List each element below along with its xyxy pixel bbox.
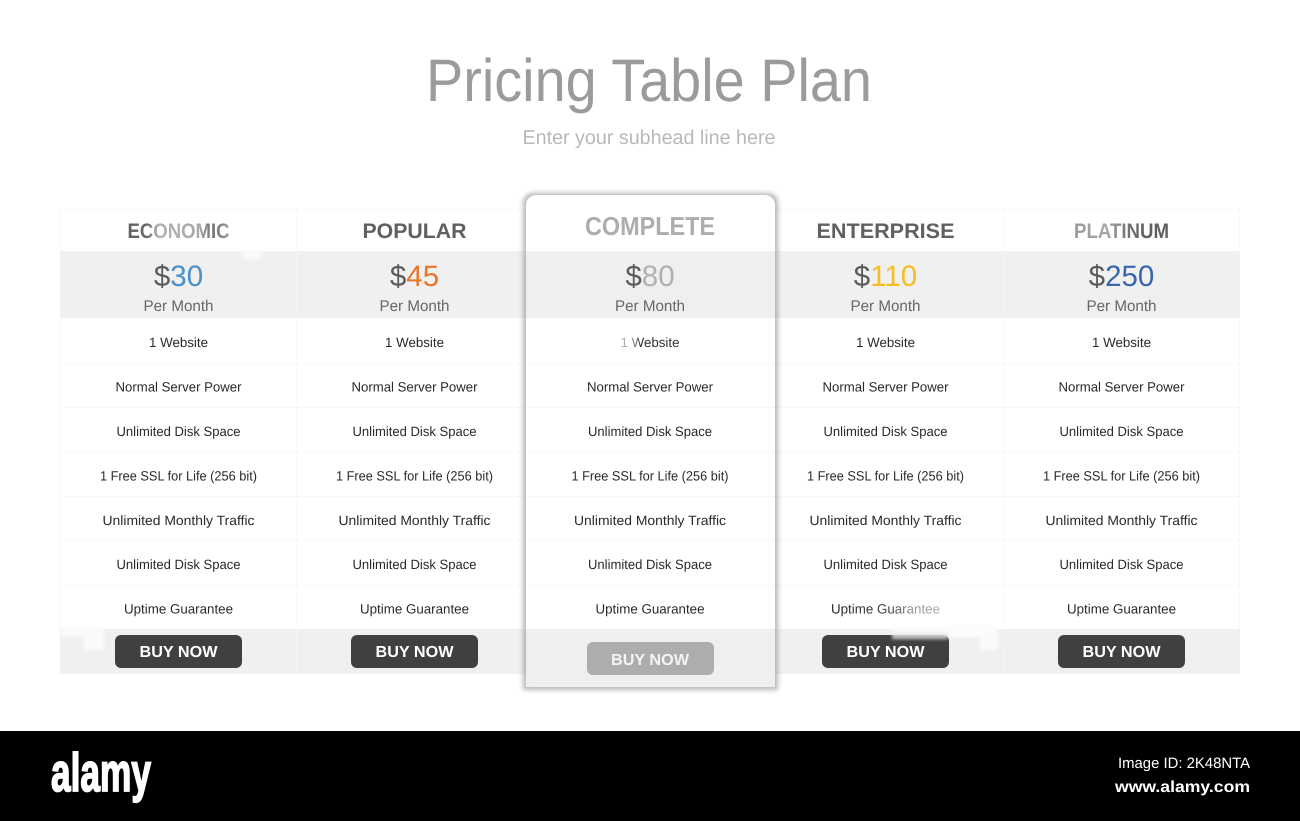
feature list: Unlimited Monthly Traffic: [574, 513, 726, 528]
price: $250: [1089, 260, 1154, 293]
price: $110: [854, 260, 917, 293]
feature list: Uptime Guarantee: [831, 602, 940, 616]
feature list: Normal Server Power: [587, 380, 713, 394]
feature list: Normal Server Power: [116, 380, 242, 394]
feature list: Unlimited Monthly Traffic: [1046, 513, 1198, 528]
subtitle: Enter your subhead line here: [522, 127, 776, 149]
billing period: Per Month: [850, 298, 920, 315]
column: enterprise: [807, 220, 964, 668]
price: $30: [154, 260, 203, 293]
feature list: Uptime Guarantee: [1067, 602, 1176, 616]
feature list: Unlimited Disk Space: [116, 424, 240, 439]
billing period: Per Month: [1086, 298, 1156, 315]
feature list: Normal Server Power: [352, 380, 478, 394]
buy button: [115, 635, 242, 668]
feature list: 1 Website: [1092, 335, 1151, 350]
feature list: Normal Server Power: [822, 380, 949, 394]
feature list: [1043, 335, 1200, 616]
title: Pricing Table Plan: [426, 47, 872, 114]
buy button: [822, 632, 949, 668]
feature list: Unlimited Disk Space: [588, 557, 712, 572]
feature list: Unlimited Disk Space: [1060, 424, 1184, 439]
price: $45: [390, 260, 439, 293]
billing period: Per Month: [144, 298, 214, 315]
feature list: Unlimited Disk Space: [352, 424, 476, 439]
feature list: Unlimited Disk Space: [588, 424, 712, 439]
plan name: COMPLETE: [585, 211, 715, 241]
column: economic: [100, 220, 257, 668]
feature list: Unlimited Monthly Traffic: [810, 513, 962, 528]
feature list: [336, 335, 493, 616]
plan name: PLATINUM: [1074, 220, 1169, 243]
plan name: ECONOMIC: [128, 220, 230, 243]
billing period: Per Month: [615, 298, 685, 315]
footer bar: [0, 731, 1300, 821]
feature list: 1 Website: [620, 335, 680, 350]
feature list: Uptime Guarantee: [596, 602, 704, 616]
feature list: Normal Server Power: [1058, 380, 1185, 394]
buy button: BUY NOW: [376, 644, 454, 661]
feature list: 1 Website: [856, 335, 915, 350]
buy button: [351, 635, 478, 668]
feature list: Uptime Guarantee: [124, 602, 233, 616]
panel: highlighted complete plan: [523, 193, 778, 690]
feature list: Unlimited Monthly Traffic: [338, 513, 491, 528]
buy button: [1058, 635, 1185, 668]
feature list: 1 Free SSL for Life (256 bit): [572, 468, 728, 484]
buy button: BUY NOW: [846, 644, 925, 661]
feature list: 1 Free SSL for Life (256 bit): [807, 468, 964, 484]
buy button: [587, 642, 714, 675]
column: popular: [336, 220, 493, 668]
feature list: 1 Free SSL for Life (256 bit): [100, 468, 257, 484]
price: $80: [625, 260, 675, 293]
column: platinum: [1043, 220, 1200, 668]
website: www.alamy.com: [1114, 779, 1250, 796]
feature list: Unlimited Disk Space: [116, 557, 240, 572]
feature list: 1 Free SSL for Life (256 bit): [336, 468, 493, 484]
feature list: Unlimited Disk Space: [352, 557, 476, 572]
buy button: BUY NOW: [140, 644, 218, 661]
feature list: [100, 335, 257, 616]
feature list: [572, 335, 728, 616]
feature list: Unlimited Disk Space: [824, 557, 948, 572]
feature list: 1 Website: [385, 335, 444, 350]
feature list: 1 Free SSL for Life (256 bit): [1043, 468, 1200, 484]
feature list: Unlimited Monthly Traffic: [102, 513, 255, 528]
buy button: BUY NOW: [1082, 644, 1161, 661]
plan name: ENTERPRISE: [816, 220, 954, 243]
feature list: Uptime Guarantee: [360, 602, 469, 616]
plan name: POPULAR: [362, 220, 466, 243]
feature list: Unlimited Disk Space: [1060, 557, 1184, 572]
billing period: Per Month: [380, 298, 450, 315]
feature list: [807, 335, 964, 616]
pricing table background: [60, 209, 1240, 674]
image id: Image ID: 2K48NTA: [1118, 755, 1250, 772]
feature list: Unlimited Disk Space: [824, 424, 948, 439]
feature list: 1 Website: [149, 335, 208, 350]
buy button: BUY NOW: [611, 652, 690, 669]
alamy logo: alamy: [51, 743, 151, 803]
